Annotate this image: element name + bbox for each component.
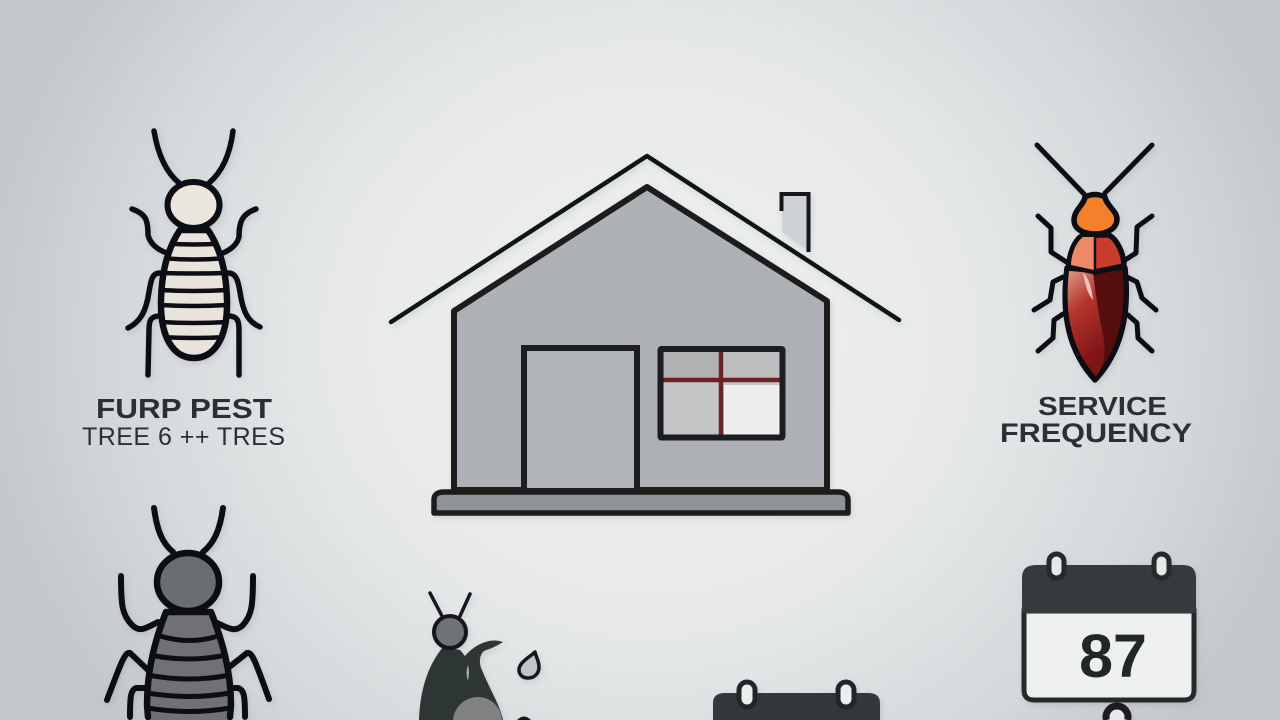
chimney: [782, 194, 808, 252]
head: [1074, 194, 1117, 234]
house wall: [454, 187, 827, 490]
legs: [1034, 216, 1156, 351]
line two: FREQUENCY: [1000, 418, 1192, 448]
binder ring left: [739, 682, 755, 707]
silhouette body: [419, 640, 503, 720]
head: [157, 553, 219, 611]
icon: calendar: [1022, 554, 1196, 720]
body: [147, 612, 231, 720]
water drop: [519, 652, 539, 678]
antennae: [430, 593, 470, 616]
calendar header: [1022, 565, 1196, 613]
calendar sheet: [1024, 611, 1194, 700]
icon: termite, cream: [128, 131, 260, 375]
calendar date: 87: [1079, 622, 1147, 690]
body stripes: [147, 636, 230, 712]
outer roof line: [391, 156, 899, 322]
antennae: [1037, 145, 1152, 195]
binder ring right: [838, 682, 854, 707]
highlight sliver: [466, 665, 469, 681]
icon: small calendar: [713, 682, 880, 720]
icon: cockroach, red: [1034, 145, 1156, 380]
hanging loop: [1106, 706, 1128, 720]
legs: [107, 576, 269, 717]
label: pest types: [82, 393, 285, 451]
belly: [453, 697, 502, 720]
subheading line: TREE 6 ++ TRES: [82, 423, 285, 451]
abdomen: [1065, 268, 1126, 380]
body: [161, 230, 227, 358]
calendar header: [713, 693, 880, 720]
head: [168, 182, 220, 228]
binder ring right: [1154, 554, 1169, 578]
thorax: [1069, 235, 1124, 272]
small drop: [517, 716, 531, 720]
icon: house: [391, 156, 899, 513]
antennae: [154, 131, 233, 183]
antennae: [154, 508, 223, 552]
door: [524, 348, 637, 491]
body stripes: [160, 243, 228, 338]
legs: [128, 209, 260, 375]
foundation: [434, 492, 848, 513]
window: [660, 349, 782, 438]
binder ring left: [1049, 554, 1064, 578]
icon: termite, dark grey: [107, 508, 269, 720]
head: [434, 616, 466, 648]
heading line: FURP PEST: [96, 393, 272, 424]
label: service frequency: [1000, 391, 1192, 448]
icon: moisture pest: [419, 593, 539, 720]
line one: SERVICE: [1038, 391, 1167, 421]
